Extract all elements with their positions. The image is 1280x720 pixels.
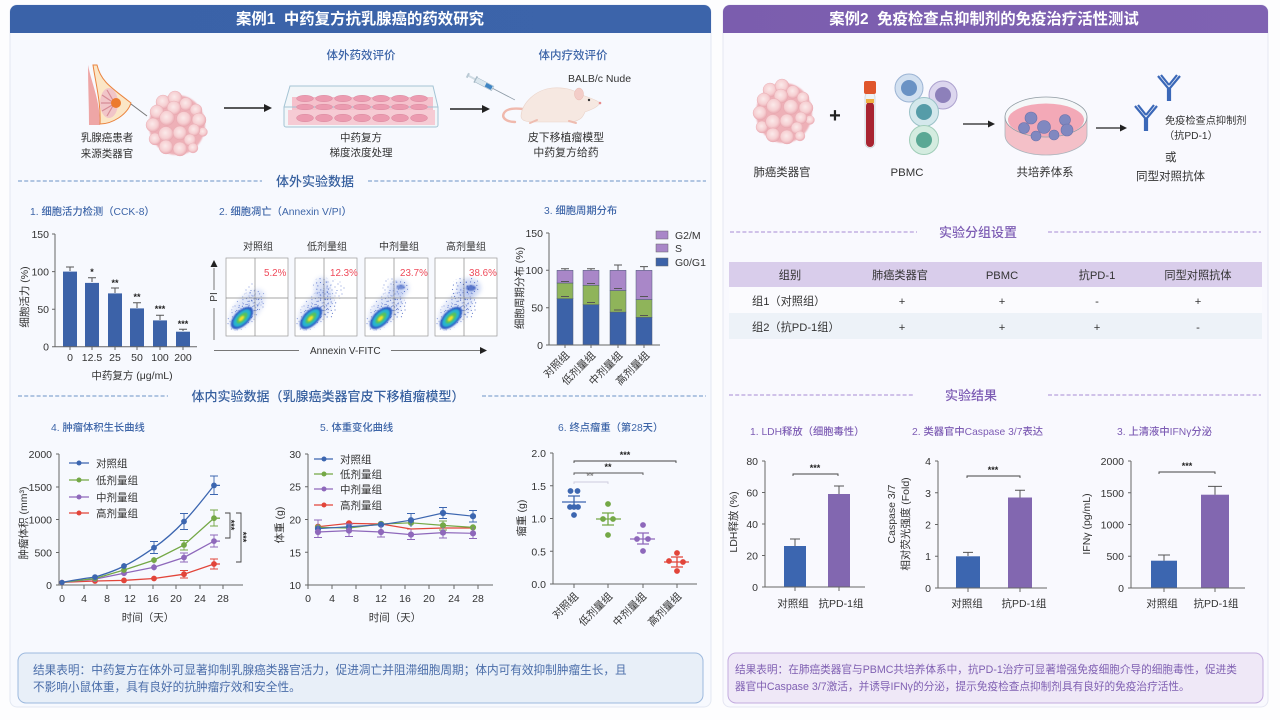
legend: tumor growth: 低剂量组 xyxy=(96,474,138,487)
workflow: case 2 xyxy=(753,74,1246,183)
chart: 1 cell viability: ** xyxy=(111,278,119,288)
chart: 5 body weight curve: 12 xyxy=(375,593,387,605)
axis: PI xyxy=(209,260,220,340)
chart: 1 cell viability: 50 xyxy=(37,304,49,316)
axis: PI: PI xyxy=(209,292,220,302)
chart: LDH release: 抗PD-1组 xyxy=(819,597,864,610)
flow plot: low dose: 低剂量组 xyxy=(307,240,347,253)
chart: 5 body weight curve: 30 xyxy=(289,449,301,461)
significance brackets xyxy=(225,513,248,562)
chart: 3 cell cycle distribution: 中剂量组 xyxy=(586,349,625,388)
chart: LDH release: 40 xyxy=(746,519,758,531)
chart: 1 cell viability: 0 xyxy=(43,342,49,354)
table: groups: - xyxy=(1196,322,1200,334)
chart: Caspase 3/7: 3 xyxy=(925,488,931,500)
chart: Caspase 3/7: 抗PD-1组 xyxy=(1002,597,1047,610)
chart: 1 cell viability: 细胞活力 (%) xyxy=(18,266,31,328)
chart: 4 tumor growth curve: 12 xyxy=(124,593,136,605)
chart: 1 cell viability: 100 xyxy=(31,266,49,278)
chart: 6 endpoint tumor weight: 6. 终点瘤重（第28天） xyxy=(558,421,663,434)
legend: cell cycle: G0/G1 xyxy=(675,257,706,269)
chart: 4 tumor growth curve: 1500 xyxy=(29,482,52,494)
chart: 5 body weight curve: 体重 (g) xyxy=(273,507,286,543)
chart: 3 cell cycle distribution: 0 xyxy=(537,340,543,352)
legend: cell cycle: S xyxy=(675,243,682,255)
legend: body weight xyxy=(314,453,382,512)
chart: LDH release: 80 xyxy=(746,456,758,468)
chart: 3 cell cycle distribution: 3. 细胞周期分布 xyxy=(544,204,617,217)
axis: Annexin V-FITC: Annexin V-FITC xyxy=(310,346,381,357)
table: groups: 组1（对照组） xyxy=(752,294,825,308)
table: groups: + xyxy=(999,296,1005,308)
legend: tumor growth: 中剂量组 xyxy=(96,491,138,504)
flow plot: control: 对照组 xyxy=(243,240,273,253)
icon: PBMC cells xyxy=(895,74,957,154)
section heading: in vitro data: 体外实验数据 xyxy=(276,174,354,189)
significance brackets: ** xyxy=(604,462,612,472)
series: mid dose xyxy=(62,535,220,582)
chart: 5 body weight curve xyxy=(273,421,493,624)
axis: Annexin V-FITC xyxy=(214,346,487,357)
callout: case 1 conclusion: 不影响小鼠体重，具有良好的抗肿瘤疗效和安全性。 xyxy=(33,680,301,694)
table: groups xyxy=(729,262,1262,339)
chart: 1 cell viability: 1. 细胞活力检测（CCK-8） xyxy=(30,205,155,218)
chart: 5 body weight curve: 10 xyxy=(289,580,301,592)
chart: 4 tumor growth curve: 1000 xyxy=(29,514,52,526)
chart: Caspase 3/7: 2. 类器官中Caspase 3/7表达 xyxy=(912,425,1043,438)
text: xenograft model: 中药复方给药 xyxy=(533,145,599,159)
chart: 5 body weight curve: 0 xyxy=(305,593,311,605)
chart: 3 cell cycle distribution: 100 xyxy=(525,265,543,277)
flow plot: high dose xyxy=(429,240,497,338)
chart: Caspase 3/7: 1 xyxy=(925,551,931,563)
table: groups: + xyxy=(899,322,905,334)
chart: Caspase 3/7 xyxy=(886,425,1047,610)
table: groups: + xyxy=(1195,296,1201,308)
arrow: to co-culture xyxy=(963,120,995,128)
flow plot: low dose: 12.3% xyxy=(330,268,358,279)
text: checkpoint inhibitor xyxy=(1164,114,1246,142)
table: groups: + xyxy=(1094,322,1100,334)
icon: lung cancer organoid xyxy=(753,79,814,144)
icon: plus: + xyxy=(829,105,841,127)
chart: 4 tumor growth curve: 4 xyxy=(81,593,87,605)
chart: 6 endpoint tumor weight: 2.0 xyxy=(531,448,546,460)
legend: body weight: 高剂量组 xyxy=(340,499,382,512)
chart: 5 body weight curve: 28 xyxy=(472,593,484,605)
header: case 2 xyxy=(723,5,1268,33)
callout: case 2 conclusion: 器官中Caspase 3/7激活，并诱导IFNγ的分泌，提示免疫检查点抑制剂具有良好的免疫治疗活性。 xyxy=(735,680,1190,693)
legend: tumor growth: 对照组 xyxy=(96,457,128,470)
legend: body weight: 中剂量组 xyxy=(340,483,382,496)
flow plot: mid dose: 中剂量组 xyxy=(379,240,419,253)
panel: case 2 xyxy=(723,5,1268,707)
workflow: case 1 xyxy=(81,48,631,160)
chart: Caspase 3/7: Caspase 3/7 xyxy=(886,484,898,543)
text: or isotype: 同型对照抗体 xyxy=(1136,169,1205,183)
significance brackets xyxy=(574,450,676,484)
text: checkpoint inhibitor: （抗PD-1） xyxy=(1164,129,1218,142)
panel: case 1 xyxy=(10,5,711,707)
chart: 5 body weight curve: 5. 体重变化曲线 xyxy=(320,421,393,434)
dots: control xyxy=(562,488,586,518)
arrow: to in vitro xyxy=(224,104,272,112)
chart: 6 endpoint tumor weight: 对照组 xyxy=(550,590,581,621)
chart: 6 endpoint tumor weight: 1.0 xyxy=(531,514,546,526)
series: control xyxy=(315,508,477,531)
chart: 4 tumor growth curve: 8 xyxy=(104,593,110,605)
chart: 4 tumor growth curve: 2000 xyxy=(29,449,52,461)
table: groups: 同型对照抗体 xyxy=(1164,268,1232,282)
chart: 5 body weight curve: 24 xyxy=(448,593,460,605)
section heading: in vivo data: 体内实验数据（乳腺癌类器官皮下移植瘤模型） xyxy=(191,389,465,404)
chart: IFN gamma: 对照组 xyxy=(1146,597,1178,610)
chart: Caspase 3/7: 相对荧光强度 (Fold) xyxy=(899,477,912,571)
text: or isotype: 或 xyxy=(1165,151,1177,164)
chart: 3 cell cycle distribution: 对照组 xyxy=(541,349,572,380)
chart: 1 cell viability: *** xyxy=(178,319,189,329)
text: xenograft model xyxy=(528,130,604,159)
chart: IFN gamma: *** xyxy=(1182,461,1193,471)
chart: 4 tumor growth curve: 500 xyxy=(34,548,52,560)
flow plot: low dose xyxy=(289,240,358,338)
chart: 4 tumor growth curve: 时间（天） xyxy=(122,611,174,624)
chart: 4 tumor growth curve: 肿瘤体积 (mm³) xyxy=(17,487,30,559)
chart: IFN gamma: 2000 xyxy=(1101,456,1124,468)
chart: 4 tumor growth curve: 0 xyxy=(59,593,65,605)
chart: Caspase 3/7: 对照组 xyxy=(951,597,983,610)
series: control xyxy=(60,476,220,585)
significance brackets: *** xyxy=(620,450,631,460)
table: groups: 肺癌类器官 xyxy=(872,268,928,282)
chart: 1 cell viability: 25 xyxy=(109,352,121,364)
chart: 6 endpoint tumor weight: 高剂量组 xyxy=(645,590,684,629)
chart: LDH release: 0 xyxy=(752,582,758,594)
chart: IFN gamma xyxy=(1081,425,1245,610)
icon: blood tube xyxy=(864,81,876,148)
arrow: to in vivo xyxy=(450,105,490,113)
table: groups: 组别 xyxy=(779,268,801,282)
chart: 2 apoptosis flow cytometry: 2. 细胞凋亡（Annexin V/PI） xyxy=(219,205,352,218)
chart: Caspase 3/7: 0 xyxy=(925,583,931,595)
legend: cell cycle: G2/M xyxy=(675,230,701,242)
table: groups: 抗PD-1 xyxy=(1079,268,1115,282)
chart: LDH release: 60 xyxy=(746,488,758,500)
chart: 4 tumor growth curve: 0 xyxy=(46,580,52,592)
flow plot: control xyxy=(220,240,288,338)
chart: LDH release: LDH释放 (%) xyxy=(727,491,740,553)
icon: nude mouse xyxy=(503,88,601,123)
table: groups: 组2（抗PD-1组） xyxy=(752,320,840,334)
chart: 4 tumor growth curve: 24 xyxy=(194,593,206,605)
table: groups: + xyxy=(999,322,1005,334)
chart: IFN gamma: 1500 xyxy=(1101,488,1124,500)
chart: Caspase 3/7: 4 xyxy=(925,456,931,468)
header: case 1 xyxy=(10,5,711,33)
header: case 1: 案例1 中药复方抗乳腺癌的药效研究 xyxy=(236,9,484,28)
series: mid dose xyxy=(314,520,477,540)
table: groups: - xyxy=(1095,296,1099,308)
chart: 4 tumor growth curve xyxy=(17,421,248,624)
text: gradient treatment: 中药复方 xyxy=(340,131,382,144)
text: co-culture: 共培养体系 xyxy=(1017,165,1073,179)
chart: IFN gamma: 0 xyxy=(1118,583,1124,595)
chart: LDH release: *** xyxy=(810,463,821,473)
heading: in vitro evaluation: 体外药效评价 xyxy=(326,48,396,62)
chart: 6 endpoint tumor weight: 中剂量组 xyxy=(610,590,649,629)
callout: case 1 conclusion xyxy=(18,653,703,703)
chart: 5 body weight curve: 25 xyxy=(289,482,301,494)
table: groups: + xyxy=(899,296,905,308)
text: mouse strain: BALB/c Nude xyxy=(568,73,631,85)
chart: 5 body weight curve: 4 xyxy=(329,593,335,605)
chart: 4 tumor growth curve: 20 xyxy=(170,593,182,605)
chart: IFN gamma: 抗PD-1组 xyxy=(1194,597,1239,610)
flow plot: control: 5.2% xyxy=(264,268,287,279)
dots: mid dose xyxy=(630,522,655,554)
chart: 1 cell viability: 150 xyxy=(31,229,49,241)
arrow: to antibody xyxy=(1096,124,1127,132)
chart: 3 cell cycle distribution: 低剂量组 xyxy=(559,349,598,388)
table: groups: PBMC xyxy=(986,270,1018,282)
chart: Caspase 3/7: *** xyxy=(988,465,999,475)
legend: tumor growth: 高剂量组 xyxy=(96,507,138,520)
series: low dose xyxy=(62,510,220,582)
chart: 3 cell cycle distribution xyxy=(513,204,706,388)
callout: case 2 conclusion: 结果表明：在肺癌类器官与PBMC共培养体系中，抗PD-1治疗可显著增强免疫细胞介导的细胞毒性，促进类 xyxy=(735,663,1237,676)
text: gradient treatment xyxy=(330,131,393,159)
chart: 1 cell viability: 50 xyxy=(131,352,143,364)
chart: 5 body weight curve: 20 xyxy=(289,514,301,526)
chart: 1 cell viability: 200 xyxy=(174,352,192,364)
icon: breast cancer organoid xyxy=(146,91,208,156)
chart: Caspase 3/7: 2 xyxy=(925,520,931,532)
series: high dose xyxy=(315,521,473,529)
chart: 5 body weight curve: 16 xyxy=(399,593,411,605)
chart: 5 body weight curve: 20 xyxy=(423,593,435,605)
icon: syringe xyxy=(465,72,517,103)
chart: 5 body weight curve: 8 xyxy=(353,593,359,605)
heading: in vivo evaluation: 体内疗效评价 xyxy=(538,48,608,62)
chart: 1 cell viability: ** xyxy=(133,292,141,302)
chart: 3 cell cycle distribution: 50 xyxy=(531,302,543,314)
chart: 6 endpoint tumor weight: 0.5 xyxy=(531,546,546,558)
chart: 4 tumor growth curve: 16 xyxy=(147,593,159,605)
text: lung cancer organoid: 肺癌类器官 xyxy=(754,165,810,179)
chart: LDH release: 20 xyxy=(746,550,758,562)
chart: 6 endpoint tumor weight xyxy=(515,421,697,629)
section heading: group setup: 实验分组设置 xyxy=(939,225,1017,240)
chart: 6 endpoint tumor weight: 0.0 xyxy=(531,579,546,591)
legend: cell cycle xyxy=(656,230,706,269)
icon: well plate xyxy=(284,86,438,127)
series: high dose xyxy=(60,559,220,585)
chart: 1 cell viability: * xyxy=(90,267,94,277)
chart: 3 cell cycle distribution: 细胞周期分布 (%) xyxy=(513,247,526,329)
chart: 1 cell viability: 100 xyxy=(151,352,169,364)
section heading: results: 实验结果 xyxy=(945,388,997,403)
chart: 4 tumor growth curve: 28 xyxy=(217,593,229,605)
icon: breast organ xyxy=(88,65,147,125)
chart: IFN gamma: 1000 xyxy=(1101,520,1124,532)
legend: tumor growth xyxy=(69,457,138,520)
chart: 6 endpoint tumor weight: 1.5 xyxy=(531,481,546,493)
chart: 5 body weight curve: 时间（天） xyxy=(369,611,421,624)
significance brackets: *** xyxy=(238,532,248,543)
icon: culture dish xyxy=(1005,97,1087,155)
chart: 1 cell viability: 中药复方 (μg/mL) xyxy=(91,369,173,382)
text: gradient treatment: 梯度浓度处理 xyxy=(330,146,393,159)
chart: 2 apoptosis flow cytometry xyxy=(209,205,497,357)
flow plot: high dose: 38.6% xyxy=(469,268,497,279)
text: source organoid xyxy=(81,131,133,160)
chart: IFN gamma: IFNγ (pg/mL) xyxy=(1081,493,1093,555)
text: source organoid: 来源类器官 xyxy=(81,147,133,160)
callout: case 2 conclusion xyxy=(728,653,1263,703)
flow plot: high dose: 高剂量组 xyxy=(446,240,486,253)
text: source organoid: 乳腺癌患者 xyxy=(81,131,133,144)
chart: LDH release: 1. LDH释放（细胞毒性） xyxy=(750,425,864,438)
chart: 1 cell viability: 12.5 xyxy=(82,352,102,364)
chart: IFN gamma: 500 xyxy=(1106,551,1124,563)
flow plot: mid dose: 23.7% xyxy=(400,268,428,279)
chart: 1 cell viability xyxy=(18,205,197,382)
chart: LDH release xyxy=(727,425,865,610)
chart: 3 cell cycle distribution: 高剂量组 xyxy=(613,349,652,388)
series: low dose xyxy=(315,520,476,531)
flow plot: mid dose xyxy=(359,240,428,338)
chart: LDH release: 对照组 xyxy=(777,597,809,610)
chart: 5 body weight curve: 15 xyxy=(289,548,301,560)
chart: 1 cell viability: *** xyxy=(155,304,166,314)
dots: low dose xyxy=(596,501,621,538)
text: PBMC: PBMC xyxy=(891,167,923,179)
chart: IFN gamma: 3. 上清液中IFNγ分泌 xyxy=(1117,425,1212,438)
chart: 3 cell cycle distribution: 150 xyxy=(525,228,543,240)
header: case 2: 案例2 免疫检查点抑制剂的免疫治疗活性测试 xyxy=(829,9,1139,28)
callout: case 1 conclusion: 结果表明：中药复方在体外可显著抑制乳腺癌类器官活力，促进凋亡并阻滞细胞周期；体内可有效抑制肿瘤生长，且 xyxy=(33,663,627,677)
legend: body weight: 低剂量组 xyxy=(340,468,382,481)
text: checkpoint inhibitor: 免疫检查点抑制剂 xyxy=(1165,114,1246,127)
legend: body weight: 对照组 xyxy=(340,453,372,466)
dots: high dose xyxy=(664,550,689,574)
chart: 4 tumor growth curve: 4. 肿瘤体积生长曲线 xyxy=(51,421,145,434)
significance brackets: ** xyxy=(586,471,594,481)
text: xenograft model: 皮下移植瘤模型 xyxy=(528,130,604,144)
icon: antibodies xyxy=(1135,75,1180,131)
chart: 1 cell viability: 0 xyxy=(67,352,73,364)
chart: 6 endpoint tumor weight: 瘤重 (g) xyxy=(515,500,528,536)
chart: 6 endpoint tumor weight: 低剂量组 xyxy=(576,590,615,629)
significance brackets: *** xyxy=(226,520,236,531)
text: or isotype xyxy=(1136,151,1205,183)
